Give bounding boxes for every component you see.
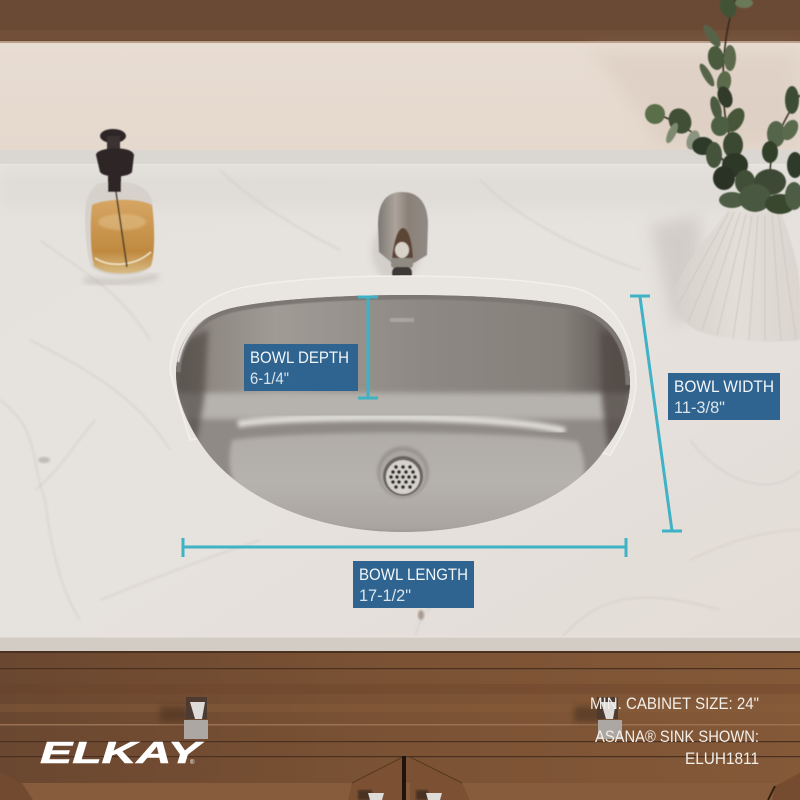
floor highlight — [238, 417, 565, 431]
label: bowl depth: BOWL DEPTH — [250, 348, 349, 367]
label: bowl width — [668, 373, 780, 420]
drain — [377, 446, 429, 498]
cabinet size and model text: ASANA® SINK SHOWN: — [595, 727, 759, 746]
logo: Elkay — [40, 735, 205, 770]
background: wall — [0, 43, 800, 151]
bowl floor — [230, 433, 584, 532]
vanity cabinet — [0, 651, 800, 800]
dimension: bowl length — [183, 538, 626, 608]
stainless bowl — [170, 290, 640, 540]
label: bowl width: BOWL WIDTH — [674, 377, 774, 396]
plant: eucalyptus — [645, 0, 800, 214]
logo: Elkay: ® — [190, 759, 195, 766]
cabinet size and model text — [590, 694, 759, 768]
label: bowl length: BOWL LENGTH — [359, 565, 468, 584]
cabinet size and model text: MIN. CABINET SIZE: 24" — [590, 694, 759, 713]
background: upper wood shelf — [0, 0, 800, 43]
marble countertop — [0, 150, 800, 651]
rim — [176, 295, 630, 385]
bowl back wall — [176, 300, 631, 405]
side shadows — [176, 330, 208, 445]
label: bowl depth: 6-1/4" — [250, 369, 289, 388]
cabinet handles — [160, 697, 622, 800]
vase — [675, 206, 800, 342]
label: bowl depth — [244, 344, 358, 391]
line: bowl width — [630, 296, 682, 531]
soap dispenser — [84, 129, 158, 282]
faucet — [372, 192, 428, 282]
dimension: bowl width — [630, 296, 780, 531]
line: bowl length — [183, 538, 626, 557]
sink cutout surround — [170, 276, 636, 455]
brand mark on sink — [390, 318, 414, 322]
line: bowl depth — [358, 297, 378, 399]
label: bowl length — [353, 561, 474, 608]
cabinet size and model text: ELUH1811 — [685, 749, 759, 768]
dimension: bowl depth — [244, 297, 378, 399]
label: bowl length: 17-1/2" — [359, 586, 411, 605]
logo: Elkay: ELKAY — [40, 735, 205, 770]
label: bowl width: 11-3/8" — [674, 398, 725, 417]
